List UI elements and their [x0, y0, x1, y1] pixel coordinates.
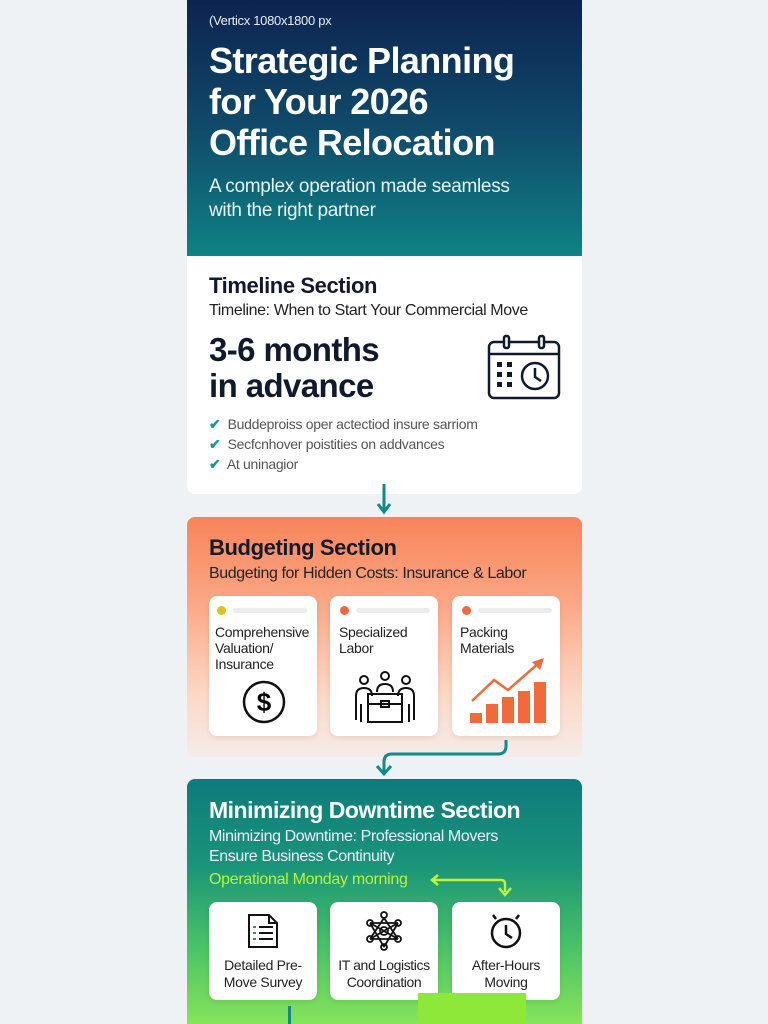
title: for Your 2026: [209, 81, 428, 122]
icon: growth chart: [470, 658, 546, 723]
card: insurance: Valuation/: [215, 640, 273, 656]
checklist: ✔ Buddeproiss oper actectiod insure sarriom: [209, 416, 478, 432]
card: survey: [209, 902, 317, 1000]
card: labor: Specialized: [339, 624, 407, 640]
card: after-hours: After-Hours: [472, 957, 540, 973]
title: Office Relocation: [209, 122, 495, 163]
arrow: timeline to budgeting: [376, 484, 392, 514]
big stat: 3-6 months: [209, 331, 379, 368]
card: packing: Packing: [460, 624, 508, 640]
card: insurance: Insurance: [215, 656, 274, 672]
panel: downtime: [187, 779, 582, 1024]
icon: calendar: [488, 334, 560, 400]
card: survey: Move Survey: [224, 974, 302, 990]
card: packing: Materials: [460, 640, 514, 656]
card: IT coordination: [330, 902, 438, 1000]
checklist: ✔ At uninagior: [209, 456, 298, 472]
card: insurance: Comprehensive: [215, 624, 309, 640]
subtitle: [209, 176, 510, 221]
subheading: Minimizing Downtime: Professional Movers: [209, 828, 498, 845]
icon: dollar: [242, 680, 286, 724]
card: packing: [452, 596, 560, 736]
heading: Budgeting Section: [209, 535, 397, 560]
subheading: Budgeting for Hidden Costs: Insurance & Labor: [209, 565, 526, 582]
title: [209, 40, 514, 163]
icon: document: [248, 914, 278, 948]
header panel: [187, 0, 582, 256]
panel: timeline: [187, 256, 582, 494]
size label: (Verticx 1080x1800 px: [209, 13, 331, 28]
subtitle: A complex operation made seamless: [209, 176, 510, 197]
checklist: [209, 416, 478, 472]
card: after-hours: [452, 902, 560, 1000]
highlight text: Operational Monday morning: [209, 871, 408, 888]
heading: Timeline Section: [209, 273, 377, 298]
decorative bottom line and block: [288, 1006, 291, 1024]
panel: budgeting: [187, 517, 582, 757]
card: survey: Detailed Pre-: [224, 957, 302, 973]
card: after-hours: Moving: [484, 974, 528, 990]
icon: dollar: $: [257, 687, 272, 717]
card: insurance: [209, 596, 317, 736]
icon: network: [366, 911, 402, 951]
heading: Minimizing Downtime Section: [209, 797, 520, 823]
arrow: budgeting to downtime: [376, 740, 508, 776]
card: labor: [330, 596, 438, 736]
card: labor: Labor: [339, 640, 373, 656]
subheading: [209, 828, 498, 865]
title: Strategic Planning: [209, 40, 514, 81]
big stat: in advance: [209, 367, 374, 404]
checklist: ✔ Secfcnhover poistities on addvances: [209, 436, 444, 452]
icon: team: [355, 671, 415, 723]
arrow: highlight: [430, 874, 512, 897]
subtitle: with the right partner: [209, 200, 376, 221]
subheading: Ensure Business Continuity: [209, 848, 394, 865]
card: IT coordination: Coordination: [347, 974, 421, 990]
icon: clock: [490, 914, 522, 948]
card: IT coordination: IT and Logistics: [338, 957, 430, 973]
big stat: [209, 331, 379, 404]
subheading: Timeline: When to Start Your Commercial Move: [209, 302, 528, 319]
